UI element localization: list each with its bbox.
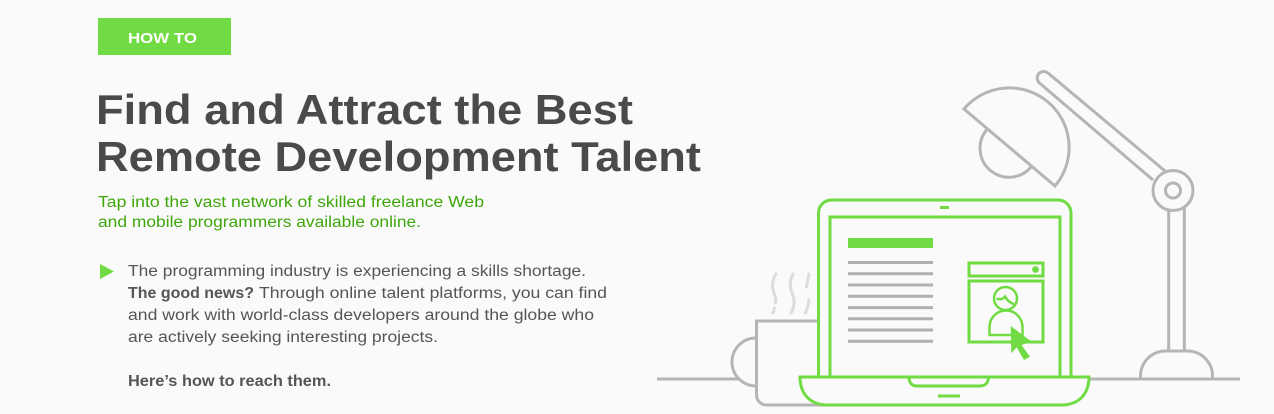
- trackpad notch: [909, 377, 988, 386]
- base mark: [938, 394, 960, 398]
- lamp joint: [1153, 170, 1193, 210]
- lamp bulb: [980, 130, 1032, 177]
- title: [96, 86, 701, 180]
- laptop base: [800, 377, 1089, 405]
- icon: desk lamp: [964, 71, 1212, 379]
- subtitle: [98, 194, 484, 231]
- badge: how to: [98, 18, 231, 55]
- intro text block: [128, 263, 607, 390]
- heading bar: [848, 238, 933, 248]
- lamp shade: [964, 88, 1069, 186]
- ground line: [657, 378, 1240, 380]
- lamp base: [1140, 351, 1212, 379]
- intro text block: Through online talent platforms, you can find: [259, 285, 607, 302]
- badge: how to: HOW TO: [128, 30, 197, 47]
- intro text block: The programming industry is experiencing a skills shortage.: [128, 263, 586, 280]
- lamp arm: [1037, 71, 1165, 180]
- profile window: [969, 281, 1043, 342]
- subtitle: and mobile programmers available online.: [98, 214, 421, 231]
- icon: cursor: [1011, 326, 1032, 360]
- lamp post: [1169, 208, 1184, 351]
- laptop screen: [830, 217, 1060, 378]
- window title bar: [969, 263, 1043, 276]
- laptop lid: [818, 200, 1071, 378]
- icon: laptop: [800, 200, 1089, 405]
- intro text block: Here’s how to reach them.: [128, 373, 331, 390]
- camera: [940, 206, 949, 209]
- icon: steam: [772, 274, 809, 313]
- icon: coffee mug: [732, 321, 830, 405]
- intro text block: are actively seeking interesting projects.: [128, 329, 438, 346]
- title: Remote Development Talent: [96, 133, 701, 180]
- subtitle: Tap into the vast network of skilled freelance Web: [98, 194, 484, 211]
- intro text block: The good news?: [128, 285, 254, 302]
- window dot: [1032, 266, 1039, 273]
- text lines: [848, 262, 933, 341]
- person hair: [996, 296, 1014, 304]
- intro text block: and work with world-class developers around the globe who: [128, 307, 594, 324]
- person body: [990, 310, 1022, 335]
- person head: [994, 287, 1017, 310]
- icon: bullet arrow: [100, 264, 114, 279]
- title: Find and Attract the Best: [96, 86, 633, 133]
